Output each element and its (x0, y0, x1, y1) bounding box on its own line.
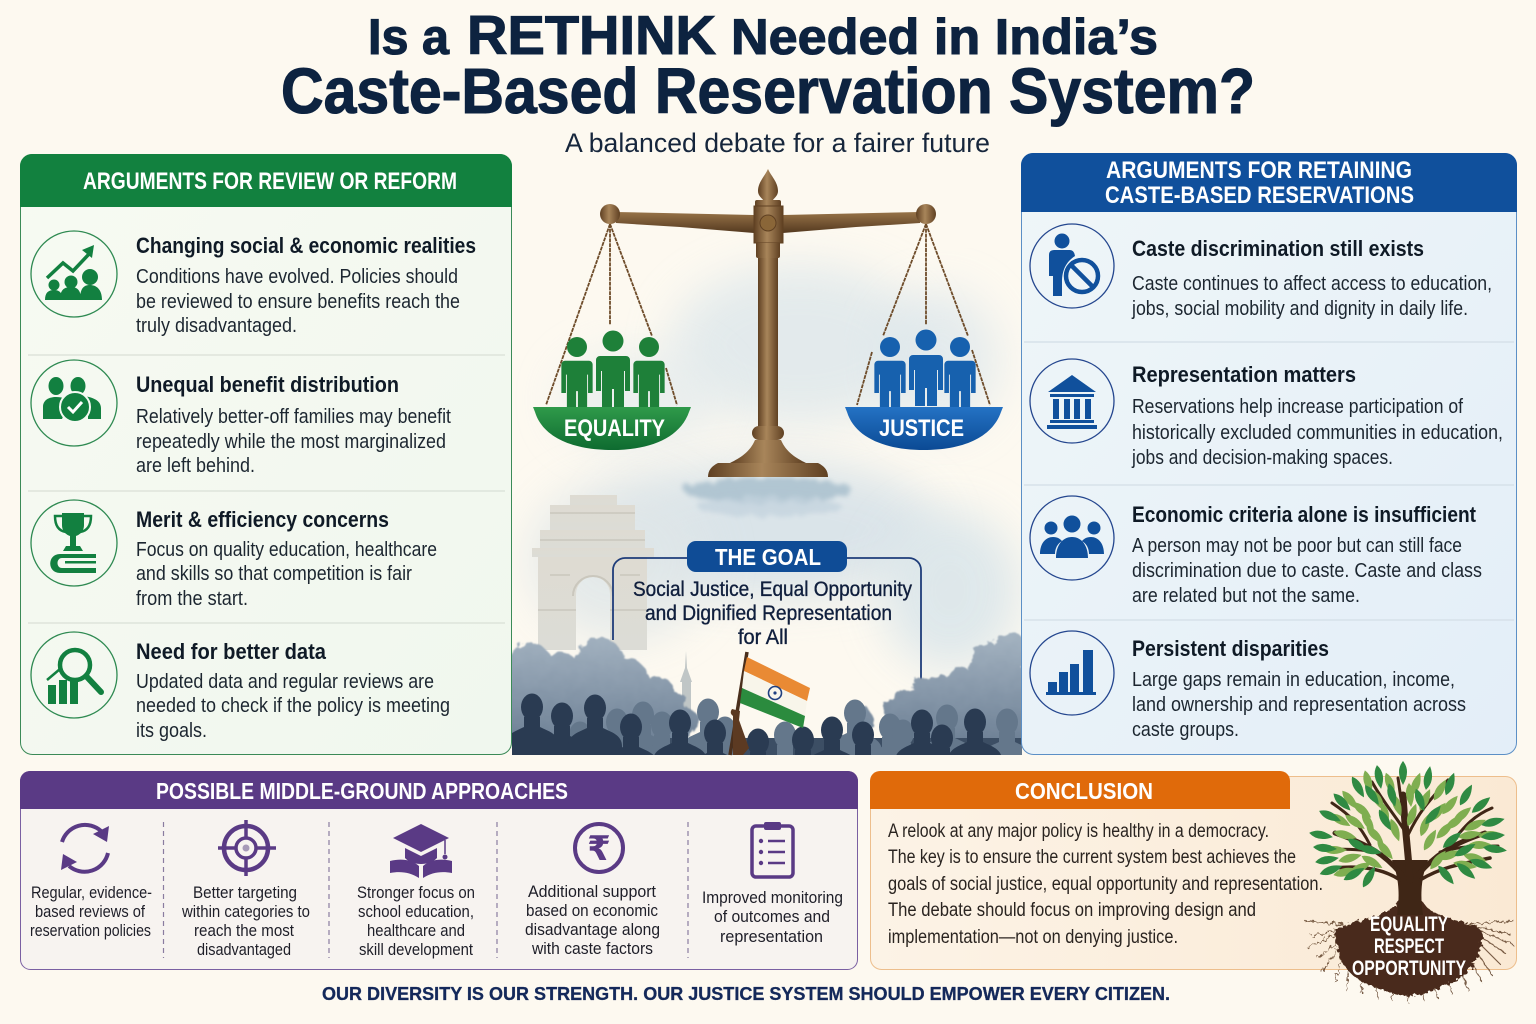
item: caste discrimination (1131, 236, 1492, 320)
item: merit and efficiency: Merit & efficiency concerns (136, 507, 389, 532)
text: stronger focus: healthcare and (367, 921, 465, 940)
footer tagline: OUR DIVERSITY IS OUR STRENGTH. OUR JUSTICE SYSTEM SHOULD EMPOWER EVERY CITIZEN. (322, 984, 1170, 1004)
heading: CONCLUSION (1015, 778, 1153, 804)
trunk and branches (1325, 778, 1498, 915)
item: merit and efficiency: from the start. (136, 588, 248, 610)
item: unequal benefit distribution: repeatedly while the most marginalized (136, 431, 446, 453)
panel: middle-ground approaches (20, 771, 858, 970)
text: regular reviews: Regular, evidence- (31, 883, 152, 902)
scale hub and finial (600, 169, 936, 250)
text: improved monitoring: Improved monitoring (702, 888, 843, 907)
panel: arguments for review or reform (20, 154, 512, 754)
text: improved monitoring: representation (720, 927, 823, 946)
item: unequal benefit distribution: are left behind. (136, 455, 255, 477)
Indian flag (730, 652, 810, 755)
goal box outline (613, 558, 921, 686)
roots (1305, 900, 1514, 1002)
icon: rupee coin (575, 824, 623, 872)
conclusion text: implementation—not on denying justice. (888, 927, 1178, 948)
scale beam (616, 212, 920, 233)
icon: unequal benefit (31, 360, 117, 446)
heading: ARGUMENTS FOR REVIEW OR REFORM (83, 168, 457, 195)
heading (1021, 153, 1517, 212)
item: representation matters: Reservations help increase participation of (1132, 396, 1463, 418)
icon: person and prohibition sign (1030, 224, 1114, 308)
item: need for better data: needed to check if the policy is meeting (136, 695, 450, 717)
India Gate (532, 495, 654, 650)
heading (20, 154, 512, 207)
goal badge: THE GOAL (715, 544, 821, 570)
text: improved monitoring: of outcomes and (714, 907, 830, 926)
tree values text: EQUALITY (1370, 913, 1448, 936)
item: representation matters (1131, 362, 1503, 469)
heading: POSSIBLE MIDDLE-GROUND APPROACHES (156, 778, 568, 804)
text: regular reviews: based reviews of (35, 902, 145, 921)
item: need for better data (136, 639, 450, 742)
item: changing realities: Conditions have evolved. Policies should (136, 266, 458, 288)
item: unequal benefit distribution (136, 372, 451, 477)
goal text: and Dignified Representation (645, 602, 892, 625)
icon: clipboard checklist (752, 822, 793, 877)
title (281, 4, 1255, 127)
text: additional support (525, 882, 660, 958)
item: unequal benefit distribution: Relatively better-off families may benefit (136, 406, 451, 428)
text: better targeting: within categories to (181, 902, 310, 921)
title: Needed in India’s (731, 9, 1158, 65)
icon: group of people (1030, 496, 1114, 580)
text: stronger focus: Stronger focus on (357, 883, 475, 902)
leaves (1308, 761, 1507, 889)
item: economic criteria: discrimination due to caste. Caste and class (1132, 560, 1482, 582)
icon: magnifier and bars (31, 632, 117, 718)
item: economic criteria (1132, 502, 1482, 607)
item: economic criteria: Economic criteria alone is insufficient (1132, 502, 1477, 527)
item: merit and efficiency: and skills so that competition is fair (136, 563, 412, 585)
green pan: Equality (533, 407, 691, 450)
green figures (561, 330, 665, 408)
blue figures (874, 330, 976, 408)
text: better targeting: disadvantaged (197, 940, 291, 959)
conclusion text (888, 821, 1323, 948)
icon: rising trend and people (31, 231, 117, 317)
item: persistent disparities (1132, 636, 1466, 741)
item: economic criteria: are related but not the same. (1132, 585, 1360, 607)
item: caste discrimination: Caste discrimination still exists (1132, 236, 1424, 261)
heading (20, 771, 858, 809)
tree values text: OPPORTUNITY (1352, 957, 1466, 980)
tree values text: RESPECT (1374, 935, 1444, 958)
chains: left pan (546, 224, 677, 405)
heading (870, 771, 1290, 809)
icon: graduation cap on book (390, 824, 452, 878)
goal text (633, 578, 912, 649)
item: persistent disparities: land ownership and representation across (1132, 694, 1466, 716)
item: changing realities: be reviewed to ensure benefits reach the (136, 291, 460, 313)
item: persistent disparities: Large gaps remain in education, income, (1132, 669, 1455, 691)
conclusion text: A relook at any major policy is healthy in a democracy. (888, 821, 1269, 842)
text: improved monitoring (702, 888, 843, 946)
item: caste discrimination: jobs, social mobility and dignity in daily life. (1131, 298, 1468, 320)
item: need for better data: its goals. (136, 720, 207, 742)
blue pan: Justice: JUSTICE (879, 415, 964, 442)
item: need for better data: Updated data and regular reviews are (136, 671, 434, 693)
text: better targeting: Better targeting (193, 883, 297, 902)
icon: rising bars (1030, 631, 1114, 715)
tree illustration (1305, 761, 1514, 1002)
goal text: for All (738, 626, 788, 649)
text: additional support: based on economic (526, 901, 658, 920)
icon: rupee coin: ₹ (587, 829, 611, 869)
item: need for better data: Need for better data (136, 639, 327, 664)
text: better targeting (181, 883, 310, 959)
icon: trophy on books (31, 500, 117, 586)
scale column and base (708, 248, 828, 477)
text: regular reviews (30, 883, 152, 940)
tree values text (1352, 913, 1466, 980)
conclusion text: goals of social justice, equal opportunity and representation. (888, 874, 1323, 895)
item: merit and efficiency: Focus on quality education, healthcare (136, 539, 437, 561)
text: stronger focus (357, 883, 475, 959)
central illustration background (530, 265, 1020, 670)
item: persistent disparities: caste groups. (1132, 719, 1239, 741)
item: representation matters: Representation matters (1132, 362, 1356, 387)
item: unequal benefit distribution: Unequal benefit distribution (136, 372, 399, 397)
subtitle: A balanced debate for a fairer future (565, 128, 990, 158)
blue pan: Justice (845, 407, 1003, 450)
panel: arguments for retaining (1021, 153, 1517, 754)
text: regular reviews: reservation policies (30, 921, 151, 940)
title: Caste-Based Reservation System? (281, 55, 1255, 127)
item: caste discrimination: Caste continues to affect access to education, (1132, 273, 1492, 295)
heading: CASTE-BASED RESERVATIONS (1105, 182, 1414, 209)
icon: target (218, 820, 276, 876)
text: additional support: with caste factors (531, 939, 653, 958)
trees and distant tower (512, 632, 1021, 738)
item: merit and efficiency (136, 507, 437, 610)
panel: conclusion (870, 771, 1516, 970)
icon: institution building (1030, 359, 1114, 443)
item: representation matters: jobs and decision-making spaces. (1131, 447, 1393, 469)
conclusion text: The key is to ensure the current system best achieves the (888, 847, 1296, 868)
item: persistent disparities: Persistent disparities (1132, 636, 1329, 661)
green pan: Equality: EQUALITY (564, 415, 665, 442)
title: Is a (368, 9, 450, 65)
item: changing realities: truly disadvantaged. (136, 315, 297, 337)
text: additional support: Additional support (528, 882, 656, 901)
title: RETHINK (467, 4, 716, 66)
text: additional support: disadvantage along (525, 920, 660, 939)
item: economic criteria: A person may not be poor but can still face (1132, 535, 1462, 557)
goal badge (687, 541, 847, 572)
the goal callout (633, 541, 912, 649)
chains: right pan (857, 224, 990, 405)
text: better targeting: reach the most (194, 921, 294, 940)
heading: ARGUMENTS FOR RETAINING (1106, 157, 1412, 184)
goal text: Social Justice, Equal Opportunity (633, 578, 912, 601)
balance scale (533, 169, 1003, 477)
text: stronger focus: school education, (358, 902, 474, 921)
item: representation matters: historically excluded communities in education, (1132, 422, 1503, 444)
text: stronger focus: skill development (359, 940, 473, 959)
item: changing realities (136, 233, 476, 337)
conclusion text: The debate should focus on improving design and (888, 900, 1256, 921)
icon: review cycle (61, 825, 109, 872)
item: changing realities: Changing social & economic realities (136, 233, 476, 258)
crowd silhouettes (512, 694, 1022, 755)
